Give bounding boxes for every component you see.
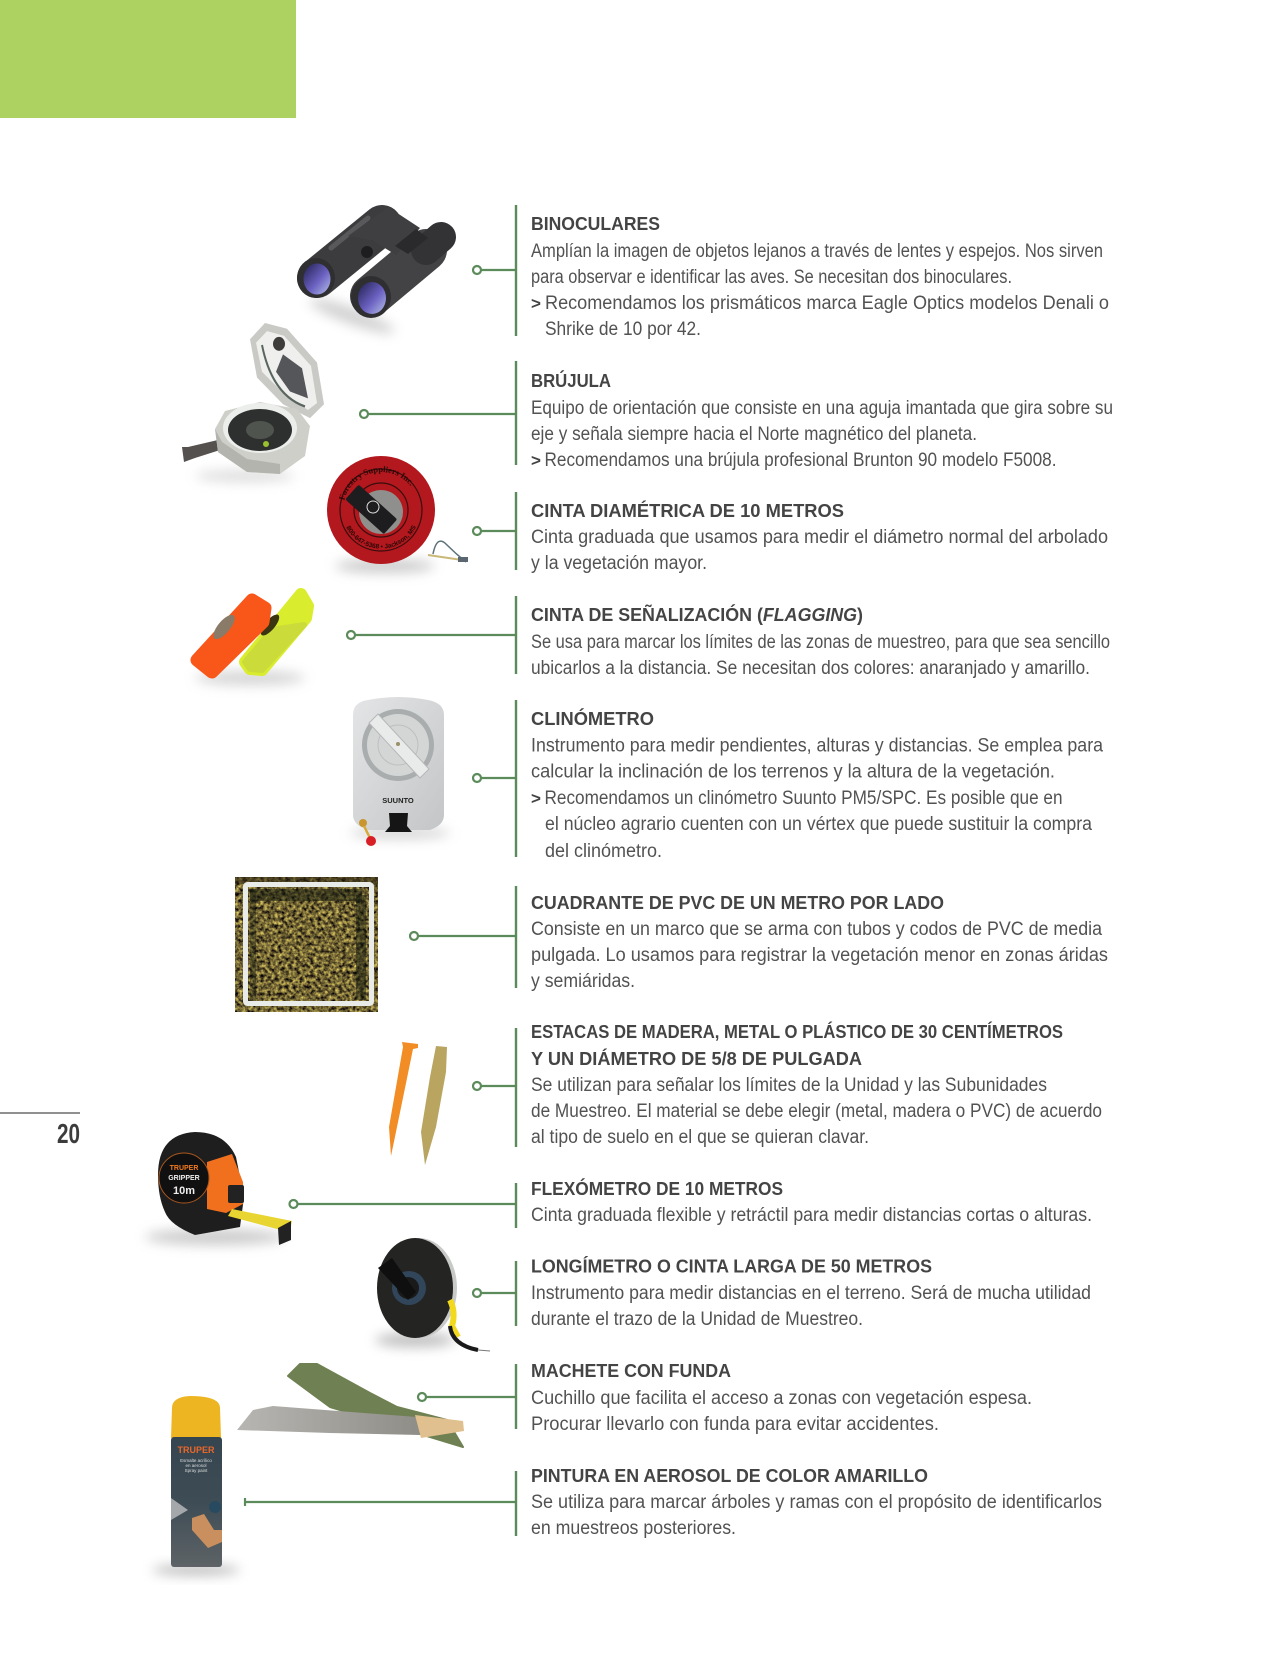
description: en muestreos posteriores.: [531, 1518, 736, 1539]
icon: red diameter tape: [327, 456, 468, 579]
icon: long tape: [375, 1238, 490, 1351]
description: >: [531, 451, 541, 470]
description: calcular la inclinación de los terrenos y la altura de la vegetación.: [531, 762, 1055, 782]
heading: CINTA DE SEÑALIZACIÓN (FLAGGING): [531, 604, 863, 625]
heading: CUADRANTE DE PVC DE UN METRO POR LADO: [531, 892, 944, 913]
icon: binoculars: [297, 207, 441, 339]
panel: cinta diametrica: [327, 456, 1108, 579]
description: el núcleo agrario cuenten con un vértex que puede sustituir la compra: [545, 814, 1092, 835]
icon: flagging rolls: [195, 594, 308, 685]
description: Recomendamos los prismáticos marca Eagle Optics modelos Denali o: [545, 293, 1109, 314]
description: Recomendamos una brújula profesional Brunton 90 modelo F5008.: [544, 450, 1056, 471]
panel: binoculares: [297, 205, 1109, 340]
description: ubicarlos a la distancia. Se necesitan dos colores: anaranjado y amarillo.: [531, 658, 1090, 679]
description: Procurar llevarlo con funda para evitar accidentes.: [531, 1414, 939, 1435]
connector: [290, 1183, 516, 1228]
description: de Muestreo. El material se debe elegir (metal, madera o PVC) de acuerdo: [531, 1101, 1102, 1122]
description: Cuchillo que facilita el acceso a zonas con vegetación espesa.: [531, 1388, 1032, 1409]
description: para observar e identificar las aves. Se necesitan dos binoculares.: [531, 267, 1012, 288]
description: Cinta graduada flexible y retráctil para medir distancias cortas o alturas.: [531, 1205, 1092, 1226]
connector: [473, 1028, 516, 1147]
heading: PINTURA EN AEROSOL DE COLOR AMARILLO: [531, 1465, 928, 1486]
connector: [473, 1261, 516, 1326]
description: Instrumento para medir distancias en el terreno. Será de mucha utilidad: [531, 1283, 1091, 1304]
connector: [245, 1471, 516, 1536]
connector: [473, 205, 516, 336]
description: >: [531, 789, 541, 808]
heading: FLEXÓMETRO DE 10 METROS: [531, 1178, 783, 1199]
panel: brujula: [182, 323, 1113, 482]
description: eje y señala siempre hacia el Norte magnético del planeta.: [531, 424, 977, 445]
heading: [531, 1021, 1063, 1069]
description: [531, 241, 1109, 340]
icon: red diameter tape: Forestry Suppliers Inc.: [338, 466, 412, 500]
heading: LONGÍMETRO O CINTA LARGA DE 50 METROS: [531, 1256, 932, 1276]
description: [531, 736, 1103, 862]
description: [531, 919, 1108, 992]
description: Se utiliza para marcar árboles y ramas con el propósito de identificarlos: [531, 1492, 1102, 1513]
description: Consiste en un marco que se arma con tubos y codos de PVC de media: [531, 919, 1102, 940]
description: [531, 1388, 1032, 1435]
heading: BINOCULARES: [531, 213, 660, 234]
heading: Y UN DIÁMETRO DE 5/8 DE PULGADA: [531, 1048, 862, 1069]
description: al tipo de suelo en el que se quieran clavar.: [531, 1127, 869, 1148]
description: Instrumento para medir pendientes, alturas y distancias. Se emplea para: [531, 736, 1103, 756]
icon: machete with sheath: [237, 1364, 464, 1447]
panel: estacas: [389, 1021, 1102, 1165]
connector: [418, 1364, 516, 1429]
description: [531, 1492, 1102, 1539]
icon: tape measure: TRUPER: [170, 1165, 198, 1172]
icon: tape measure: 10m: [173, 1185, 195, 1197]
description: Se usa para marcar los límites de las zonas de muestreo, para que sea sencillo: [531, 632, 1110, 653]
green corner block: [0, 0, 296, 118]
heading: BRÚJULA: [531, 370, 611, 391]
description: >: [531, 294, 541, 313]
description: y semiáridas.: [531, 971, 635, 992]
panel: cuadrante de pvc: [235, 877, 1108, 1012]
connector: [360, 361, 516, 465]
icon: spray can: TRUPER: [177, 1445, 215, 1455]
description: [531, 1283, 1091, 1330]
heading: CLINÓMETRO: [531, 708, 654, 729]
panel: flexometro: [145, 1132, 1092, 1245]
panel: machete: [237, 1360, 1032, 1447]
description: durante el trazo de la Unidad de Muestreo.: [531, 1309, 863, 1330]
icon: spray can: en aerosol: [185, 1463, 207, 1468]
icon: pvc quadrat photo: [235, 877, 378, 1012]
description: [531, 398, 1113, 471]
description: [531, 632, 1110, 679]
panel: longimetro: [375, 1238, 1091, 1351]
icon: spray can: Esmalte acrílico: [180, 1458, 212, 1463]
description: Se utilizan para señalar los límites de la Unidad y las Subunidades: [531, 1075, 1047, 1096]
icon: spray can: [152, 1396, 240, 1575]
description: Amplían la imagen de objetos lejanos a través de lentes y espejos. Nos sirven: [531, 241, 1103, 262]
icon: spray can: Spray paint: [185, 1468, 208, 1473]
icon: stakes: [389, 1042, 447, 1165]
icon: tape measure: GRIPPER: [168, 1175, 200, 1182]
icon: tape measure: [145, 1132, 292, 1245]
icon: red diameter tape: 800-647-5368 • Jackson, MS: [346, 525, 416, 548]
description: Cinta graduada que usamos para medir el diámetro normal del arbolado: [531, 527, 1108, 548]
description: del clinómetro.: [545, 841, 662, 862]
description: Equipo de orientación que consiste en una aguja imantada que gira sobre su: [531, 398, 1113, 419]
icon: clinometer: SUUNTO: [382, 796, 414, 805]
page number: [0, 1113, 80, 1149]
heading: CINTA DIAMÉTRICA DE 10 METROS: [531, 500, 844, 521]
connector: [473, 700, 516, 857]
heading: ESTACAS DE MADERA, METAL O PLÁSTICO DE 30 CENTÍMETROS: [531, 1021, 1063, 1042]
connector: [347, 596, 516, 674]
description: pulgada. Lo usamos para registrar la vegetación menor en zonas áridas: [531, 945, 1108, 966]
description: [531, 1075, 1102, 1148]
connector: [410, 886, 516, 988]
icon: compass: [182, 323, 324, 482]
description: Recomendamos un clinómetro Suunto PM5/SPC. Es posible que en: [544, 788, 1062, 809]
panel: pintura en aerosol: [152, 1396, 1102, 1575]
connector: [473, 492, 516, 570]
description: Shrike de 10 por 42.: [545, 319, 701, 340]
page number: 20: [57, 1118, 80, 1149]
heading: MACHETE CON FUNDA: [531, 1360, 731, 1381]
panel: cinta de senalizacion: [195, 594, 1110, 685]
icon: clinometer: [350, 697, 450, 846]
description: y la vegetación mayor.: [531, 553, 707, 574]
description: [531, 527, 1108, 574]
panel: clinometro: [350, 697, 1103, 862]
